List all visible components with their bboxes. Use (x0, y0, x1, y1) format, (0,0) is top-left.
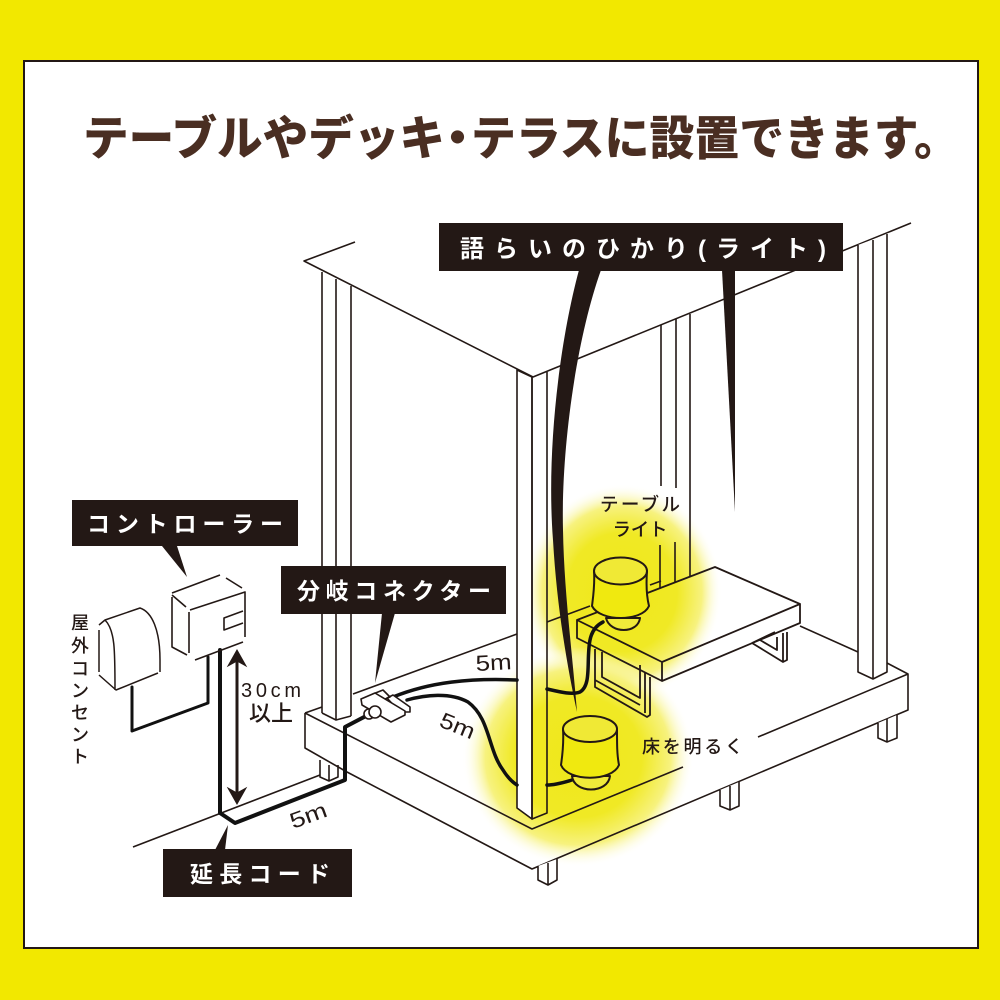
cable: outlet to controller (132, 657, 208, 731)
controller box (172, 575, 245, 660)
callout: branch connector (281, 566, 506, 683)
callout: extension cord: 延長コード (190, 861, 330, 887)
title: テーブルやデッキ (83, 112, 445, 165)
callout: controller (72, 500, 298, 577)
callout: controller: コントローラー (87, 511, 283, 537)
callout: branch connector: 分岐コネクター (297, 578, 491, 604)
label: table light: テーブル (600, 494, 680, 515)
callout: light label: 語らいのひかり(ライト) (460, 236, 826, 263)
deck surface and edges (305, 581, 908, 869)
label: height: 以上 (249, 701, 293, 726)
callout: extension cord (163, 825, 352, 897)
label: 5m lengths: 5m (436, 707, 479, 744)
title: ・ (434, 112, 481, 165)
title (83, 112, 959, 165)
label: 5m lengths: 5m (475, 649, 512, 676)
ground line (133, 775, 320, 847)
label: floor: 床を明るく (642, 737, 743, 757)
cable: floor light (407, 695, 572, 785)
outlet (99, 608, 160, 690)
label: 5m lengths (286, 649, 512, 834)
title: テラスに設置できます。 (471, 112, 959, 165)
label: outlet vertical: 外 (71, 636, 89, 656)
callout pointer: light (551, 270, 601, 712)
back post (660, 314, 690, 588)
cable: table light (393, 622, 603, 697)
label: 5m lengths: 5m (286, 797, 330, 834)
callout pointer: light right (722, 270, 735, 512)
callout: light label (439, 223, 843, 271)
label: table light: ライト (612, 519, 668, 540)
deck legs (320, 760, 338, 781)
light glow: floor (462, 647, 694, 867)
label: outlet vertical (71, 613, 89, 767)
label: outlet vertical: 屋 (71, 613, 89, 633)
30cm arrow (228, 650, 246, 804)
floor light (561, 716, 619, 790)
table light (592, 558, 649, 630)
label: outlet vertical: ト (71, 747, 89, 767)
branch connector (361, 690, 410, 722)
label: table light (600, 494, 680, 540)
light glow: table (522, 484, 722, 700)
roof beams (304, 223, 911, 377)
label: outlet vertical: セ (71, 703, 89, 723)
deck structure (133, 223, 911, 885)
cable: extension (220, 650, 366, 823)
table (577, 567, 800, 717)
label: height: 30cm (241, 680, 301, 702)
middle post (517, 370, 547, 819)
cables (132, 622, 603, 823)
right post (858, 234, 887, 679)
left post (322, 272, 351, 720)
label: outlet vertical: ン (71, 681, 89, 701)
label: height (241, 680, 301, 726)
label: outlet vertical: コ (71, 659, 89, 679)
label: outlet vertical: ン (71, 725, 89, 745)
